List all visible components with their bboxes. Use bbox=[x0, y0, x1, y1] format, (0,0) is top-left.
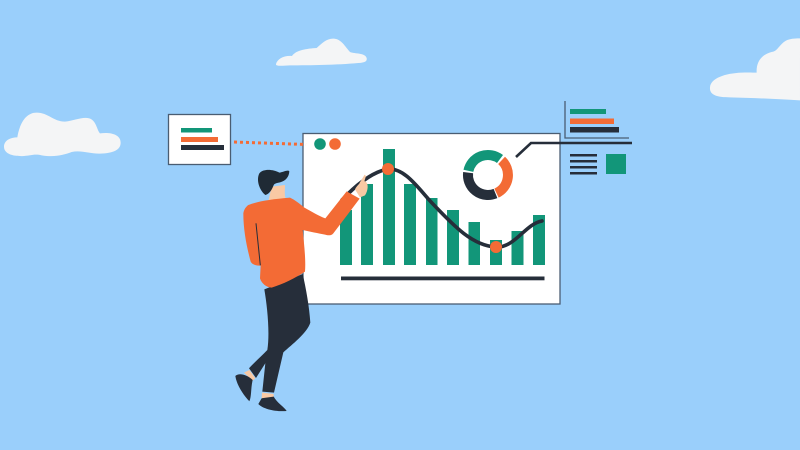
curve marker: peak bbox=[382, 163, 394, 175]
sweater bbox=[243, 191, 360, 288]
front ankle bbox=[262, 393, 274, 398]
panel: main chart board bbox=[303, 134, 560, 304]
donut connector line bbox=[516, 143, 632, 157]
hand bbox=[355, 181, 368, 197]
cloud: left bbox=[4, 113, 121, 156]
pants bbox=[249, 274, 310, 393]
neck bbox=[269, 185, 287, 200]
back shoe bbox=[235, 374, 253, 401]
front shoe bbox=[258, 396, 287, 411]
sleeve fold bbox=[256, 223, 260, 265]
cloud: top centre bbox=[276, 39, 367, 66]
cloud: top right bbox=[710, 38, 800, 100]
bar chart bbox=[340, 149, 545, 265]
legend lines bbox=[570, 154, 597, 174]
legend square bbox=[606, 154, 626, 174]
hair bbox=[258, 170, 289, 195]
figure: man pointing bbox=[235, 170, 368, 411]
indicator dots bbox=[314, 138, 341, 150]
back ankle bbox=[244, 370, 255, 381]
donut chart bbox=[468, 155, 508, 195]
curve marker: trough bbox=[490, 241, 502, 253]
mini bar chart top right bbox=[565, 101, 629, 138]
pointing finger bbox=[359, 175, 366, 185]
line curve bbox=[342, 169, 542, 247]
chart baseline bbox=[341, 276, 544, 280]
dotted connector bbox=[234, 142, 306, 144]
panel: small legend card bbox=[168, 114, 230, 164]
